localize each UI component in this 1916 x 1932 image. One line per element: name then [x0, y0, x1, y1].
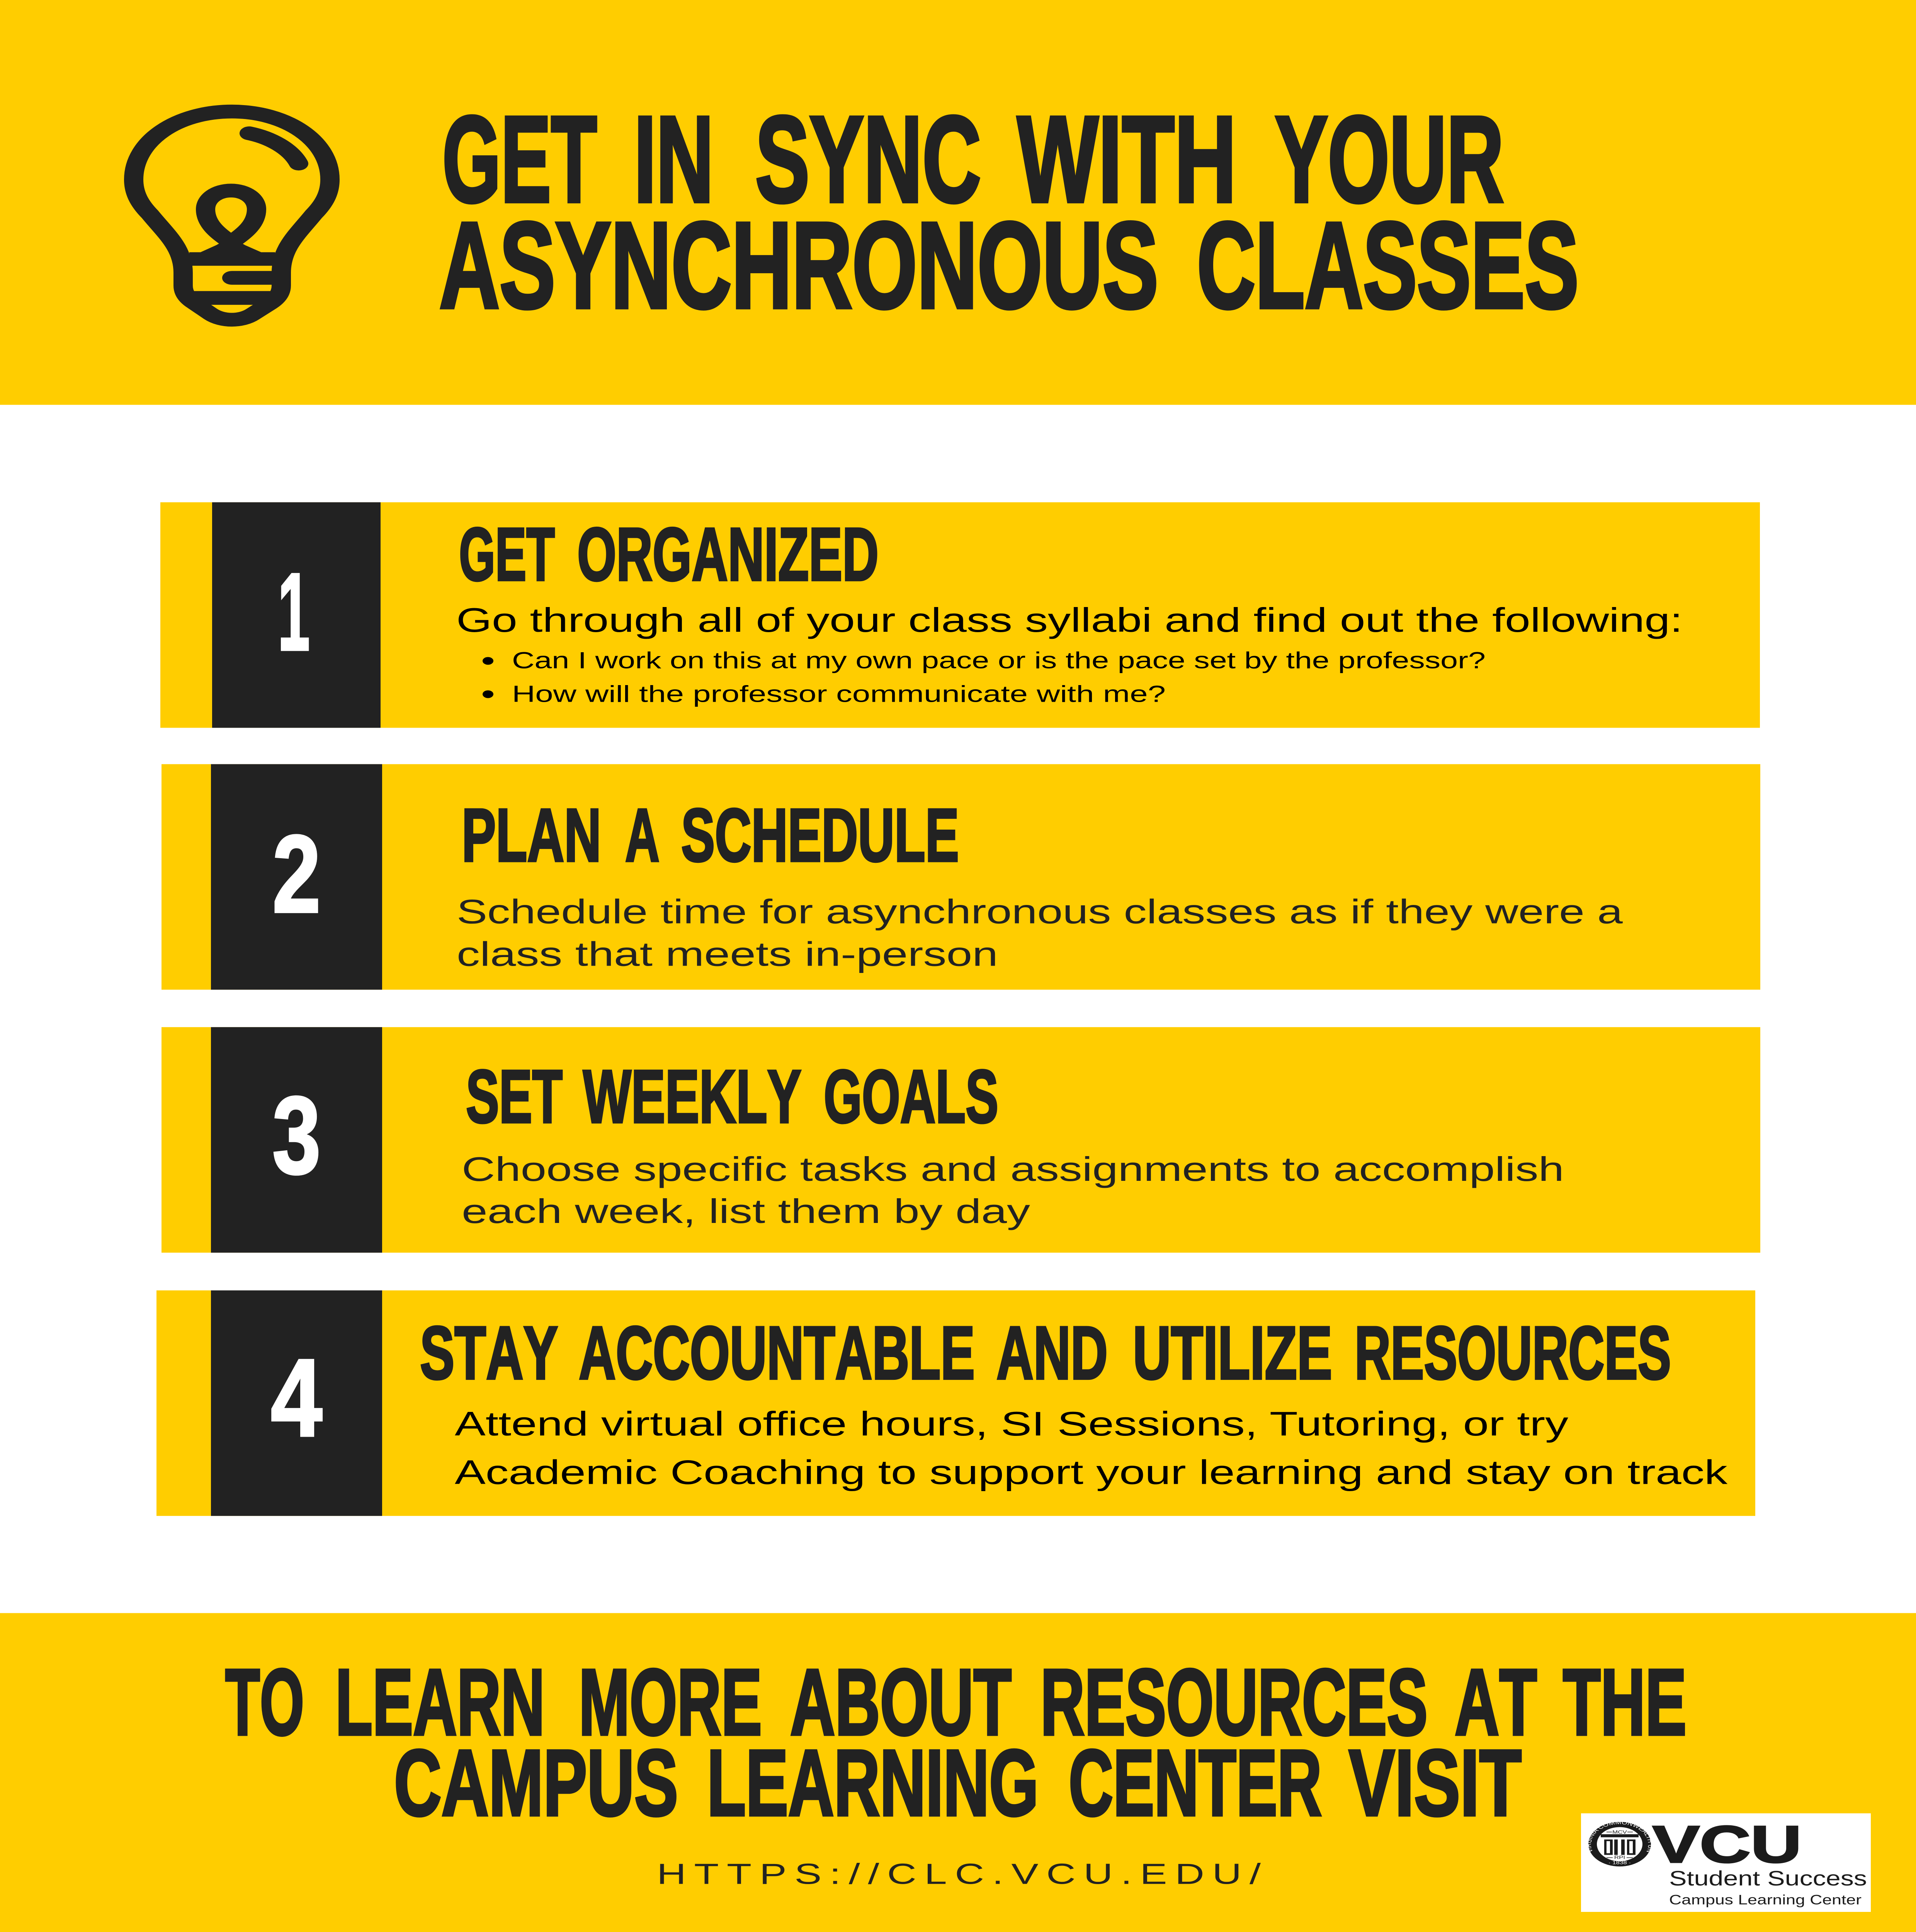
- icon: university seal: MCV: [1612, 1830, 1627, 1835]
- footer heading: VISIT: [1349, 1730, 1522, 1835]
- title: WITH: [1017, 90, 1236, 228]
- title: IN: [634, 90, 714, 228]
- heading: stay accountable: STAY: [420, 1311, 558, 1395]
- panel: step 3 set weekly goals: GOALS: [824, 1054, 998, 1139]
- heading: stay accountable: [420, 1311, 1671, 1395]
- number 3: 3: [272, 1074, 321, 1197]
- url: HTTPS://CLC.VCU.EDU/: [657, 1858, 1261, 1890]
- title: SYNC: [755, 90, 981, 228]
- bullet list: Can I work on this at my own pace or is the pace set by the professor?: [512, 648, 1486, 673]
- bullet list: How will the professor communicate with me?: [512, 681, 1166, 707]
- footer heading: CENTER: [1069, 1730, 1322, 1835]
- heading: get organized: [459, 512, 879, 596]
- heading: plan a schedule: A: [625, 793, 660, 877]
- text: resources description: Attend virtual office hours, SI Sessions, Tutoring, or try: [455, 1405, 1568, 1443]
- footer heading: ABOUT: [790, 1650, 1012, 1755]
- panel: step 1 get organized: [160, 502, 1760, 728]
- heading: plan a schedule: [462, 793, 959, 877]
- footer heading: TO: [225, 1650, 304, 1755]
- text: schedule description: [457, 893, 1623, 973]
- text: goals description: [462, 1150, 1564, 1230]
- text: intro: Go through all of your class syllabi and find out the following:: [456, 601, 1683, 639]
- icon: university seal: VIRGINIA COMMONWEALTH UNIVERSITY: [0, 0, 1654, 1853]
- footer heading: RESOURCES: [1040, 1650, 1428, 1755]
- text: goals description: each week, list them by day: [462, 1192, 1030, 1230]
- heading: get organized: GET: [459, 512, 555, 596]
- title: GET: [442, 90, 597, 228]
- panel: step 1 get organized: ORGANIZED: [577, 512, 879, 596]
- icon: light bulb: [134, 112, 330, 320]
- number 4: 4: [271, 1336, 323, 1459]
- text: resources description: [455, 1405, 1727, 1491]
- footer heading: MORE: [579, 1650, 762, 1755]
- title: [439, 90, 1579, 333]
- panel: step 2 plan a schedule: [162, 764, 1760, 990]
- footer heading: CAMPUS: [394, 1730, 678, 1835]
- icon: university seal: · 1838 ·: [1608, 1861, 1631, 1866]
- panel: step 4 stay accountable: [156, 1291, 1755, 1516]
- title: ASYNCHRONOUS: [439, 197, 1158, 333]
- footer heading: LEARNING: [707, 1730, 1039, 1835]
- panel: step 2 plan a schedule: SCHEDULE: [681, 793, 959, 877]
- title: YOUR: [1275, 90, 1504, 228]
- panel: step 3 set weekly goals: [162, 1027, 1760, 1253]
- logo line: campus learning center: Campus Learning Center: [1669, 1893, 1862, 1908]
- icon: university seal: RPI: [1614, 1855, 1625, 1860]
- panel: step 1 get organized: 1: [278, 550, 310, 673]
- logo line: student success: Student Success: [1669, 1866, 1867, 1890]
- text: goals description: Choose specific tasks and assignments to accomplish: [462, 1150, 1564, 1188]
- heading: stay accountable: ACCOUNTABLE: [579, 1311, 975, 1395]
- heading: set weekly goals: SET: [466, 1054, 563, 1139]
- footer heading: AT: [1455, 1650, 1537, 1755]
- bullet list: [483, 648, 1486, 707]
- text: schedule description: class that meets in-person: [457, 935, 998, 973]
- text: resources description: Academic Coaching to support your learning and stay on track: [455, 1453, 1727, 1491]
- heading: set weekly goals: WEEKLY: [583, 1054, 801, 1139]
- heading: stay accountable: UTILIZE: [1133, 1311, 1332, 1395]
- header band: [0, 0, 1916, 405]
- number 2: 2: [272, 813, 321, 935]
- text: schedule description: Schedule time for asynchronous classes as if they were a: [457, 893, 1623, 930]
- footer heading: [225, 1650, 1686, 1835]
- logo wordmark: VCU: [1652, 1815, 1802, 1873]
- footer band: THE: [1563, 1650, 1686, 1755]
- heading: plan a schedule: PLAN: [462, 793, 601, 877]
- heading: stay accountable: AND: [996, 1311, 1108, 1395]
- footer heading: LEARN: [335, 1650, 545, 1755]
